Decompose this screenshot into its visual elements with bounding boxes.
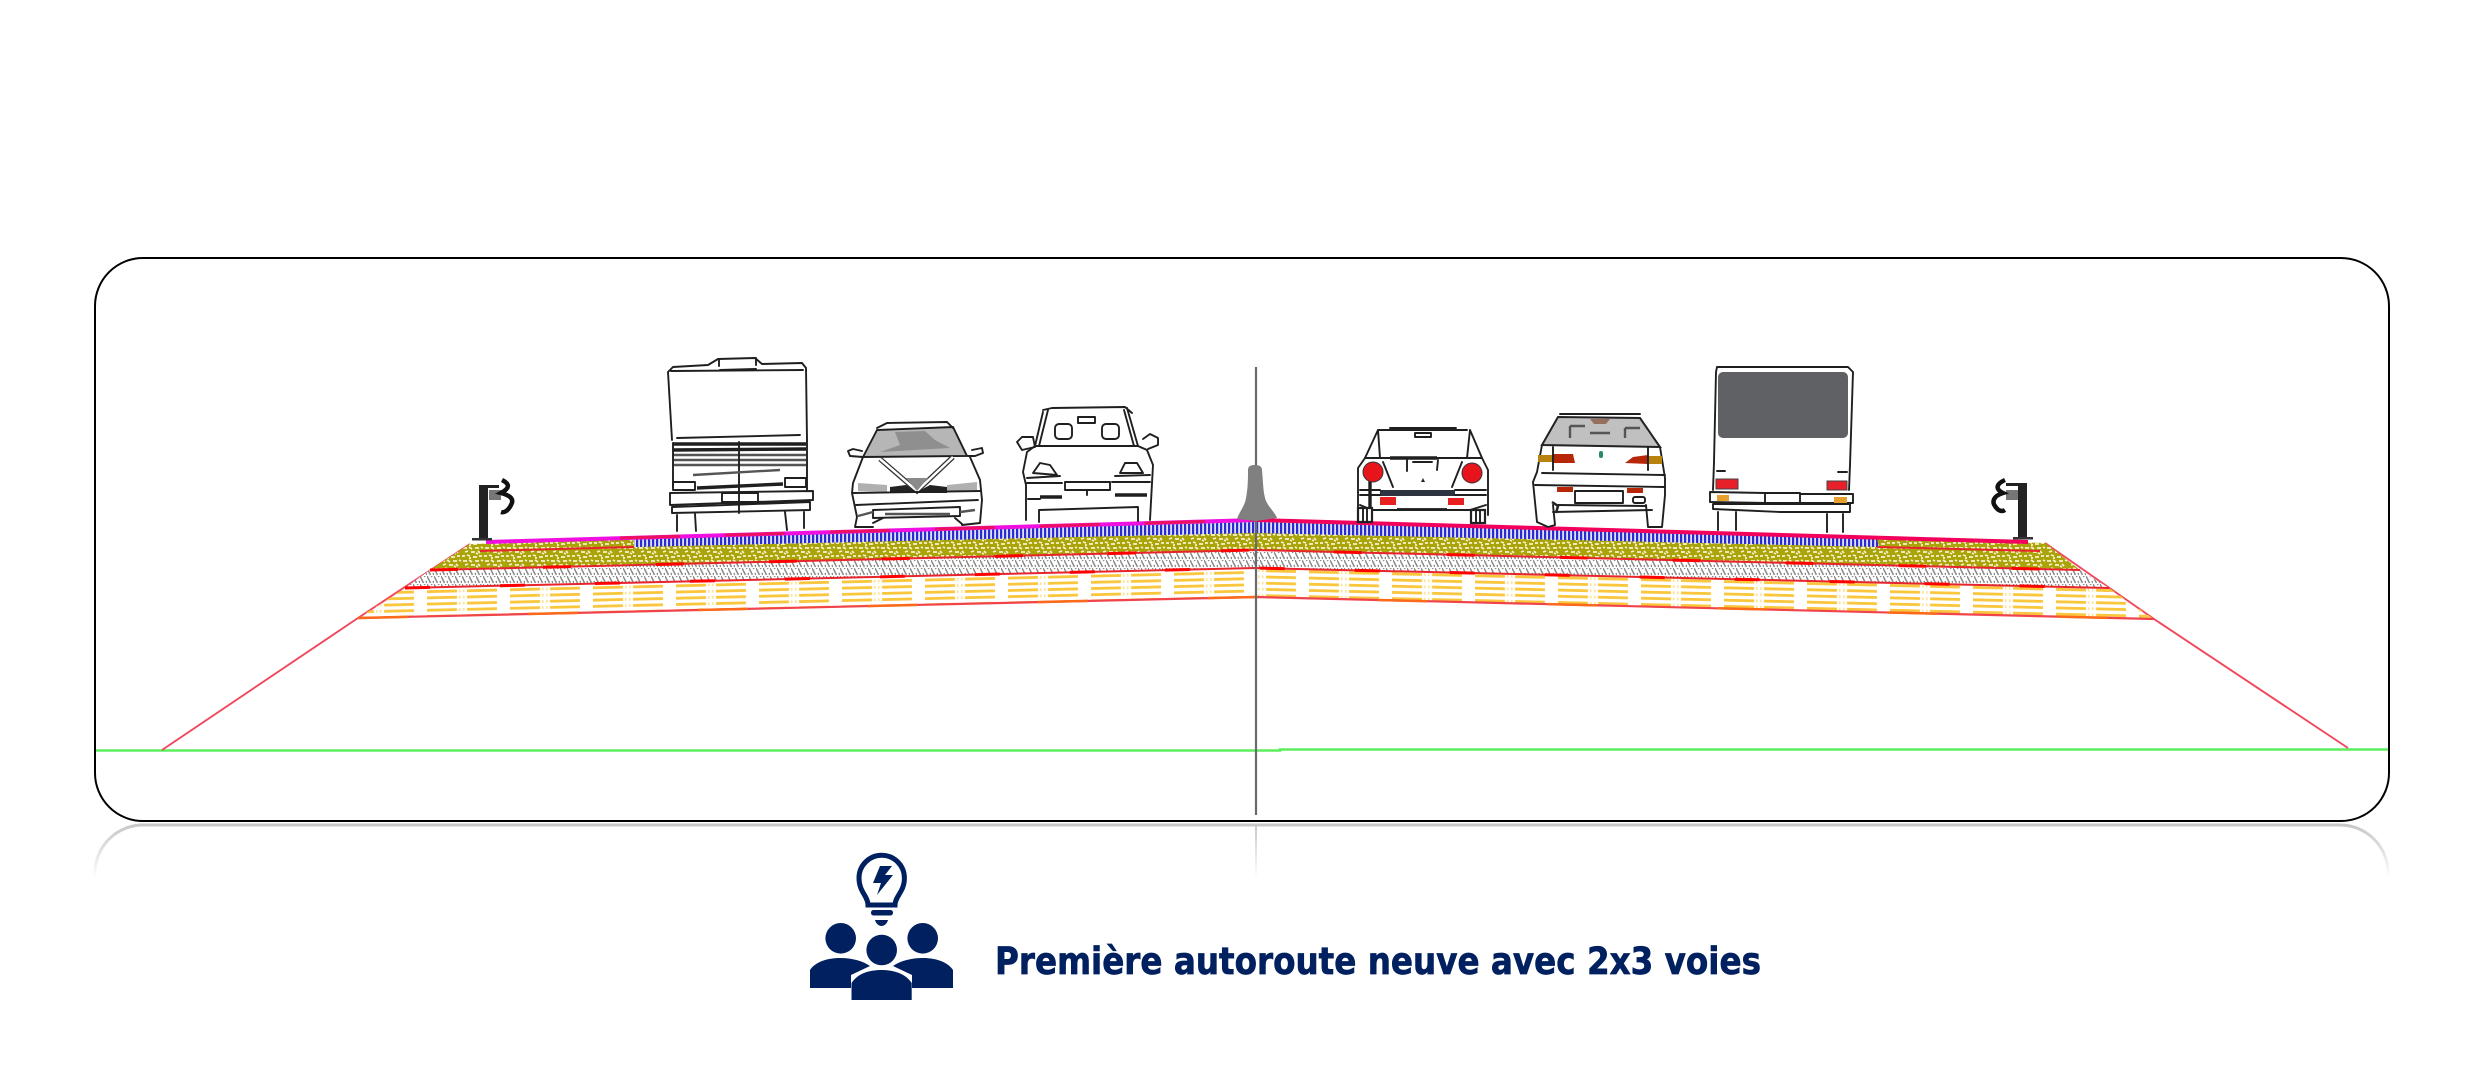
layer: yellow foundation	[358, 568, 2154, 619]
road surface line	[486, 520, 2028, 542]
embankment slopes	[162, 543, 2348, 750]
vehicle: coach rear view	[1710, 367, 1853, 532]
icon: right road signal	[1994, 480, 2033, 540]
vehicle: car interior front view	[1017, 407, 1158, 522]
layer: blue pavement	[634, 522, 1879, 547]
icon: people with light bulb	[810, 855, 953, 1000]
vehicle: coach front view	[668, 358, 813, 531]
vehicle: hatchback rear view	[1533, 414, 1665, 527]
vehicle: car front view	[848, 422, 983, 527]
people	[810, 923, 953, 1000]
panel: road cross-section frame	[95, 258, 2389, 821]
centre axis line	[1255, 367, 1257, 815]
layer: grey hatched sub-base	[405, 550, 2109, 588]
bulb	[859, 855, 904, 926]
icon: left road signal	[472, 480, 512, 540]
layer: olive gravel base	[430, 522, 2080, 570]
panel reflection	[95, 825, 2388, 878]
road layers	[358, 520, 2154, 619]
caption: Première autoroute neuve avec 2x3 voies	[995, 940, 1761, 983]
median barrier	[1237, 465, 1277, 521]
ground line	[96, 750, 2388, 751]
red layer boundaries	[358, 547, 2154, 619]
vehicle: small car rear view	[1358, 428, 1488, 523]
